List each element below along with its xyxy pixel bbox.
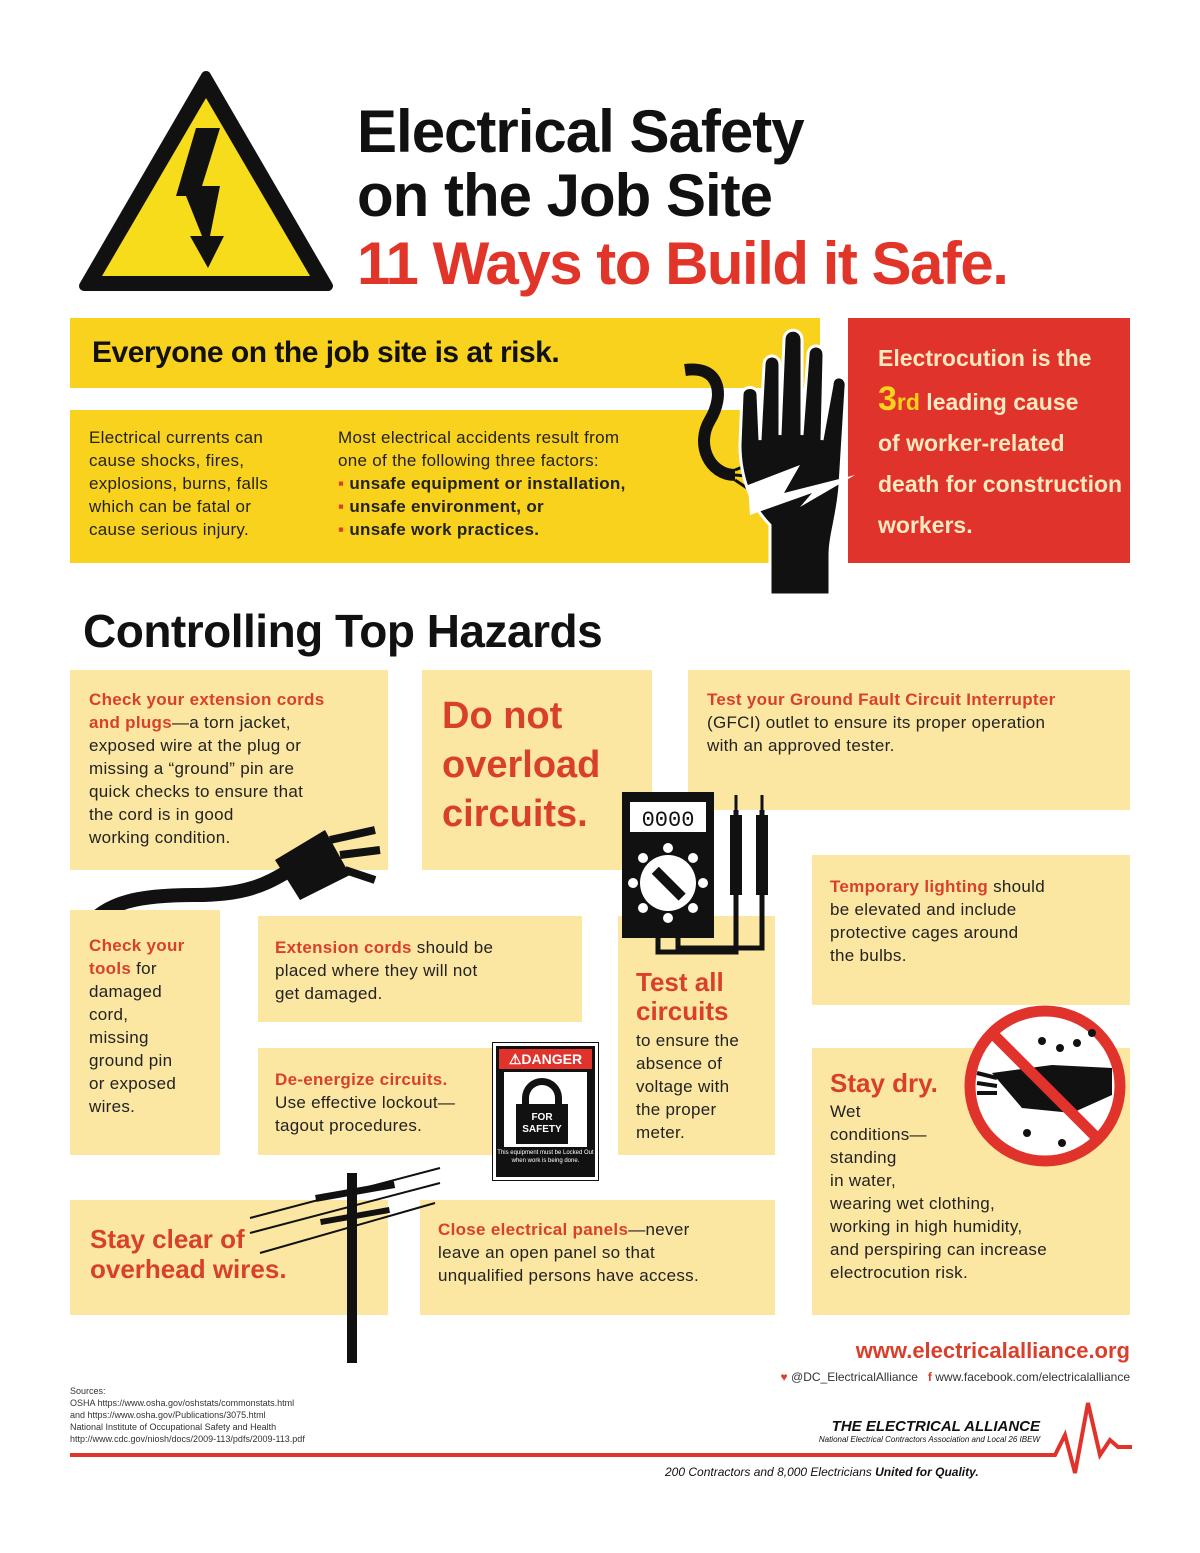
panel: test all circuits: to ensure the	[636, 1031, 739, 1050]
panel: stay dry: standing	[830, 1148, 897, 1167]
text: three factors: ▪ unsafe environment, or	[338, 497, 544, 516]
text: three factors	[338, 428, 626, 539]
title: 11 Ways to Build it Safe.	[357, 230, 1007, 297]
icon: danger sign: SAFETY	[522, 1124, 562, 1135]
panel: extension cords and plugs: exposed wire at the plug or	[89, 736, 301, 755]
text: three factors: ▪ unsafe equipment or installation,	[338, 474, 626, 493]
panel: extension cords placement: Extension cords should be	[275, 938, 493, 957]
panel: red statistic	[848, 318, 1130, 563]
panel: check tools	[70, 910, 220, 1155]
icon: hand with wire	[684, 328, 855, 594]
panel: overhead wires	[70, 1200, 388, 1315]
icon: multimeter: 0000	[642, 808, 694, 833]
panel: red statistic: Electrocution is the	[878, 345, 1091, 371]
panel: do not overload: overload	[442, 744, 600, 786]
panel: de-energize: Use effective lockout—	[275, 1093, 455, 1112]
panel: check tools: cord,	[89, 1005, 128, 1024]
panel: stay dry: conditions—	[830, 1125, 927, 1144]
panel: test all circuits: the proper	[636, 1100, 716, 1119]
panel: de-energize: tagout procedures.	[275, 1116, 422, 1135]
panel: check tools: damaged	[89, 982, 162, 1001]
panel: check tools: wires.	[89, 1097, 135, 1116]
panel: do not overload: circuits.	[442, 793, 588, 835]
panel: extension cords placement: placed where they will not	[275, 961, 477, 980]
panel: test all circuits: circuits	[636, 996, 728, 1026]
panel: extension cords placement: get damaged.	[275, 984, 383, 1003]
footer: alliance logo	[819, 1418, 1041, 1444]
title: on the Job Site	[357, 162, 772, 229]
panel: test all circuits: meter.	[636, 1123, 685, 1142]
panel: extension cords and plugs: the cord is in good	[89, 805, 234, 824]
icon: danger sign: This equipment must be Locked Out when work is being done.	[497, 1150, 594, 1164]
text: three factors: Most electrical accidents result from	[338, 428, 619, 447]
panel: GFCI: (GFCI) outlet to ensure its proper operation	[707, 713, 1045, 732]
text: currents: which can be fatal or	[89, 497, 251, 516]
panel: extension cords and plugs: Check your extension cords	[89, 690, 324, 709]
panel: temporary lighting: protective cages around	[830, 923, 1018, 942]
text: sources: National Institute of Occupational Safety and Health	[70, 1422, 276, 1432]
panel: stay dry: in water,	[830, 1171, 896, 1190]
panel: temporary lighting: Temporary lighting should	[830, 877, 1045, 896]
icon: warning triangle	[79, 71, 333, 291]
panel: GFCI	[688, 670, 1130, 810]
panel: GFCI: Test your Ground Fault Circuit Interrupter	[707, 690, 1056, 709]
text: sources: Sources:	[70, 1386, 106, 1396]
banner: everyone at risk: Everyone on the job site is at risk.	[92, 336, 559, 369]
text: sources	[70, 1386, 305, 1444]
panel: stay dry: electrocution risk.	[830, 1263, 968, 1282]
panel: stay dry: working in high humidity,	[830, 1217, 1022, 1236]
panel: extension cords and plugs	[70, 670, 388, 870]
panel: test all circuits: Test all	[636, 967, 724, 997]
panel: GFCI: with an approved tester.	[707, 736, 895, 755]
panel: risk factors	[70, 410, 770, 563]
panel: do not overload: Do not	[442, 695, 562, 737]
icon: danger sign: ⚠DANGER	[509, 1051, 582, 1067]
footer: website and social: www.electricalalliance.org	[856, 1338, 1130, 1363]
text: three factors: one of the following three factors:	[338, 451, 599, 470]
text: three factors: ▪ unsafe work practices.	[338, 520, 539, 539]
panel: extension cords and plugs: working condition.	[89, 828, 230, 847]
banner: everyone at risk	[70, 318, 820, 388]
panel: do not overload	[422, 670, 652, 870]
panel: extension cords and plugs: missing a “ground” pin are	[89, 759, 294, 778]
icon: plug	[94, 826, 380, 910]
footer: website and social: ♥ @DC_ElectricalAlliance f www.facebook.com/electricalalliance	[781, 1370, 1130, 1384]
panel: overhead wires: Stay clear of	[90, 1224, 245, 1254]
panel: stay dry: Stay dry.	[830, 1068, 938, 1098]
panel: close panels	[420, 1200, 775, 1315]
panel: check tools: or exposed	[89, 1074, 176, 1093]
title	[357, 98, 1007, 297]
panel: de-energize: De-energize circuits.	[275, 1070, 448, 1089]
panel: red statistic: workers.	[878, 512, 973, 538]
panel: extension cords and plugs: quick checks to ensure that	[89, 782, 303, 801]
icon: power pole	[250, 1167, 440, 1363]
panel: check tools: Check your	[89, 936, 185, 955]
panel: test all circuits	[618, 916, 775, 1155]
icon: danger sign	[493, 1043, 598, 1180]
panel: red statistic: death for construction	[878, 471, 1122, 497]
panel: test all circuits: absence of	[636, 1054, 722, 1073]
text: currents: cause shocks, fires,	[89, 451, 244, 470]
panel: check tools: tools for	[89, 959, 157, 978]
text: sources: and https://www.osha.gov/Publications/3075.html	[70, 1410, 266, 1420]
panel: stay dry: wearing wet clothing,	[830, 1194, 995, 1213]
panel: temporary lighting	[812, 855, 1130, 1005]
panel: close panels: leave an open panel so that	[438, 1243, 655, 1262]
icon: danger sign: FOR	[531, 1112, 553, 1123]
panel: extension cords placement	[258, 916, 582, 1022]
text: tagline: 200 Contractors and 8,000 Electricians United for Quality.	[665, 1465, 979, 1479]
heading: controlling top hazards: Controlling Top Hazards	[83, 605, 602, 657]
icon: multimeter	[622, 792, 768, 954]
text: sources: http://www.cdc.gov/niosh/docs/2009-113/pdfs/2009-113.pdf	[70, 1434, 305, 1444]
footer: red line with pulse	[70, 1402, 1132, 1474]
panel: stay dry	[812, 1048, 1130, 1315]
panel: stay dry: and perspiring can increase	[830, 1240, 1047, 1259]
footer: alliance logo: National Electrical Contractors Association and Local 26 IBEW	[819, 1435, 1040, 1444]
icon: no wet hands	[964, 1006, 1126, 1166]
text: currents: Electrical currents can	[89, 428, 263, 447]
panel: de-energize	[258, 1048, 498, 1155]
text: currents	[89, 428, 268, 539]
panel: check tools: missing	[89, 1028, 149, 1047]
panel: temporary lighting: be elevated and include	[830, 900, 1016, 919]
title: Electrical Safety	[357, 98, 804, 165]
text: currents: cause serious injury.	[89, 520, 249, 539]
panel: stay dry: Wet	[830, 1102, 861, 1121]
panel: close panels: unqualified persons have access.	[438, 1266, 699, 1285]
panel: red statistic: 3rd leading cause	[878, 380, 1078, 418]
panel: close panels: Close electrical panels—never	[438, 1220, 690, 1239]
text: currents: explosions, burns, falls	[89, 474, 268, 493]
footer: alliance logo: THE ELECTRICAL ALLIANCE	[832, 1418, 1040, 1435]
panel: overhead wires: overhead wires.	[90, 1254, 287, 1284]
panel: red statistic: of worker-related	[878, 430, 1065, 456]
text: sources: OSHA https://www.osha.gov/oshstats/commonstats.html	[70, 1398, 294, 1408]
panel: extension cords and plugs: and plugs—a torn jacket,	[89, 713, 291, 732]
panel: check tools: ground pin	[89, 1051, 172, 1070]
footer: website and social	[781, 1338, 1130, 1384]
panel: test all circuits: voltage with	[636, 1077, 729, 1096]
panel: temporary lighting: the bulbs.	[830, 946, 907, 965]
